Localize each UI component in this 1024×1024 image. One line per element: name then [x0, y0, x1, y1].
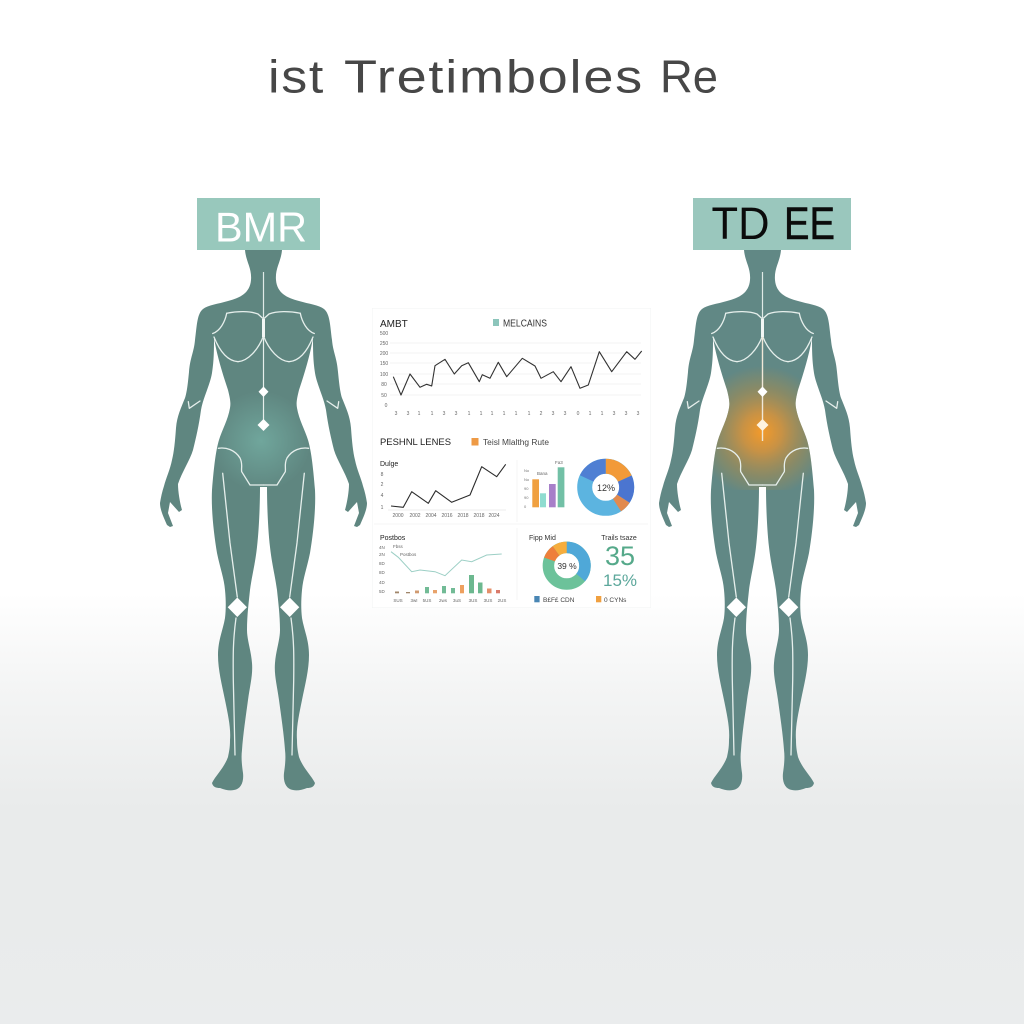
figure: TDEE body	[659, 250, 866, 790]
title: Tretimboles	[344, 50, 644, 102]
donut legend: B£F£ CDN	[543, 597, 575, 604]
chart: top line chart: 500	[380, 331, 388, 337]
chart: top line chart: 3	[395, 411, 398, 417]
chart: middle left line chart: 2	[381, 482, 384, 488]
chart: lower left mixed chart: 3uS	[453, 598, 461, 603]
chart: middle left line chart: 2002	[409, 513, 421, 519]
panel: dashboard	[372, 308, 651, 608]
label: BMR: BMR	[215, 204, 307, 250]
chart: lower donut	[548, 547, 585, 584]
chart: top line chart: 1	[589, 411, 592, 417]
chart: lower left mixed chart: 3US	[484, 598, 492, 603]
title: ist	[268, 50, 325, 102]
chart: bar chart: No	[524, 468, 530, 473]
chart: middle left line chart: 8	[381, 472, 384, 478]
chart: middle left line chart: 2024	[488, 513, 500, 519]
chart: lower left mixed chart: 8D	[379, 561, 386, 566]
chart: lower left mixed chart: 4D	[379, 580, 386, 585]
donut label: lower: 39 %	[557, 561, 577, 571]
title: Re	[660, 50, 718, 102]
chart: top line chart: 1	[480, 411, 483, 417]
chart: middle left line chart: 2000	[392, 513, 404, 519]
chart: middle left line chart: 2016	[441, 513, 453, 519]
chart: top line chart: 0	[577, 411, 580, 417]
section heading row: Teisl Mlalthg Rute	[483, 438, 550, 447]
chart: top line chart: 3	[455, 411, 458, 417]
stat block: 15%	[603, 571, 637, 590]
chart: top line chart: 3	[407, 411, 410, 417]
chart: bar chart: Fa3	[555, 460, 563, 465]
chart: top line chart: AMBT	[380, 319, 408, 330]
chart: top line chart: 1	[491, 411, 494, 417]
chart: top line chart	[380, 318, 642, 417]
chart: top donut	[585, 466, 627, 508]
chart: lower left mixed chart: SUS	[393, 598, 403, 603]
stat block	[601, 535, 637, 590]
label: TDEE	[693, 198, 851, 250]
chart: lower left mixed chart: 2ws	[439, 598, 448, 603]
chart: top line chart: 80	[381, 382, 387, 388]
chart: bar chart: 0	[524, 504, 527, 509]
chart: top line chart: 1	[601, 411, 604, 417]
donut legend	[534, 596, 627, 604]
chart: middle left line chart: 2018	[457, 513, 469, 519]
chart: bar chart: 90	[524, 495, 529, 500]
chart: top line chart: 3	[613, 411, 616, 417]
chart: top line chart: 1	[528, 411, 531, 417]
chart: top line chart: 0	[385, 403, 388, 409]
chart: lower left mixed chart: Postbos	[380, 535, 406, 542]
chart: top line chart: 3	[552, 411, 555, 417]
chart: lower left mixed chart	[379, 535, 506, 603]
chart: top line chart: 1	[503, 411, 506, 417]
chart: lower left mixed chart: 2US	[498, 598, 506, 603]
stat block: Trails tsaze	[601, 535, 637, 542]
core glow: BMR	[224, 404, 298, 478]
section heading row	[380, 437, 550, 448]
chart: top line chart: 3	[564, 411, 567, 417]
chart: top line chart: 150	[380, 361, 388, 367]
chart: lower left mixed chart: 4N	[379, 545, 385, 550]
figure: BMR body	[160, 250, 367, 790]
chart: middle left line chart: 2018	[473, 513, 485, 519]
section heading row: PESHNL LENES	[380, 437, 451, 448]
chart: bar chart: Bana	[537, 471, 548, 476]
label: BMR	[197, 198, 320, 250]
label: TDEE: EE	[784, 198, 835, 249]
chart: top line chart: 2	[540, 411, 543, 417]
chart: lower left mixed chart: 3US	[469, 598, 477, 603]
chart: bar chart	[524, 460, 564, 509]
chart: middle left line chart: 1	[381, 505, 384, 511]
chart: middle left line chart: Dulge	[380, 461, 398, 468]
donut heading: Fipp Mid	[529, 535, 556, 542]
chart: top line chart: 250	[380, 341, 388, 347]
donut label: top: 12%	[597, 483, 615, 493]
chart: middle left line chart: 2004	[425, 513, 437, 519]
chart: lower left mixed chart: 5US	[423, 598, 431, 603]
chart: top line chart: 1	[418, 411, 421, 417]
chart: top line chart: 3	[443, 411, 446, 417]
label: TDEE: TD	[712, 198, 770, 249]
chart: lower left mixed chart: 2N	[379, 552, 385, 557]
chart: lower left mixed chart: 3wI	[410, 598, 418, 603]
chart: lower left mixed chart: 5D	[379, 589, 386, 594]
chart: top line chart: 3	[625, 411, 628, 417]
chart: middle left line chart	[380, 461, 506, 519]
chart: top line chart: 100	[380, 372, 388, 378]
donut legend: 0 CYNs	[604, 597, 627, 604]
title	[268, 50, 718, 102]
chart: top line chart: 1	[431, 411, 434, 417]
chart: top line chart: 3	[637, 411, 640, 417]
chart: top line chart: 200	[380, 351, 388, 357]
stat block: 35	[605, 541, 635, 571]
chart: top line chart: 1	[515, 411, 518, 417]
chart: middle left line chart: 4	[381, 493, 384, 499]
chart: bar chart: No	[524, 477, 530, 482]
chart: top line chart: 50	[381, 393, 387, 399]
chart: lower left mixed chart: 8D	[379, 570, 386, 575]
chart: top line chart: 1	[468, 411, 471, 417]
core glow: TDEE	[713, 370, 812, 490]
chart: top line chart: MELCAINS	[503, 318, 547, 330]
chart: lower left mixed chart: Postbos	[400, 552, 417, 557]
chart: bar chart: 90	[524, 486, 529, 491]
chart: lower left mixed chart: Fbss	[393, 544, 404, 549]
